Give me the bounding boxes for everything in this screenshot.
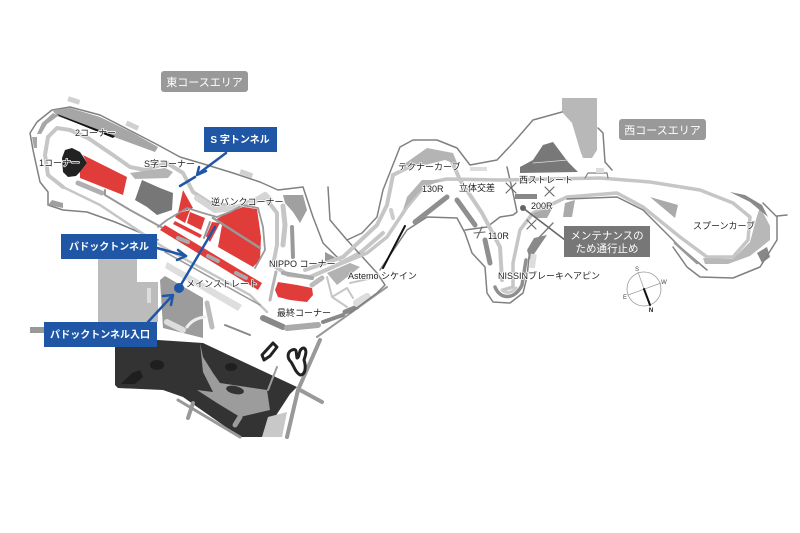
track labels: 立体交差 (459, 182, 495, 193)
label: パドックトンネル入口 (44, 322, 157, 347)
callout: maintenance closure (520, 205, 650, 257)
track labels: NISSINブレーキヘアピン (498, 270, 600, 281)
track labels: 200R (531, 201, 553, 211)
map: east course (30, 96, 387, 337)
icon: compass (623, 267, 667, 314)
track labels: 1コーナー (39, 158, 80, 168)
map: connecting section and west course (305, 112, 787, 313)
map: dark parking area (115, 303, 322, 437)
track labels: メインストレート (186, 279, 258, 289)
label: S字トンネル: S 字トンネル (210, 133, 270, 146)
icon: compass: N (649, 308, 653, 314)
map: red paddock areas (80, 155, 313, 302)
label: 西コースエリア (619, 119, 706, 140)
icon: compass: E (623, 295, 627, 301)
track labels: 逆バンクコーナー (211, 196, 283, 207)
label: 西コースエリア: 西コースエリア (624, 125, 701, 137)
label: 東コースエリア: 東コースエリア (166, 76, 243, 89)
label: 東コースエリア (161, 71, 248, 92)
track labels (39, 128, 755, 318)
track labels: Astemo シケイン (348, 271, 417, 281)
map: black infield blob (62, 148, 87, 177)
map: car park blocks (30, 98, 597, 338)
label: パドックトンネル入口: パドックトンネル入口 (50, 329, 150, 341)
track labels: 2コーナー (75, 128, 116, 138)
label: S字トンネル (204, 127, 277, 152)
map: paddock structure (158, 205, 265, 278)
callout: maintenance closure: ため通行止め (576, 242, 638, 255)
label: パドックトンネル (61, 234, 157, 259)
track labels: 西ストレート (519, 175, 573, 185)
map: grey building (135, 180, 173, 215)
blue tunnel markers (148, 153, 226, 322)
track labels: S字コーナー (144, 159, 195, 169)
track labels: 130R (422, 184, 444, 194)
icon: compass: S (635, 267, 639, 273)
track labels: 110R (488, 231, 509, 241)
track labels: 最終コーナー (277, 307, 331, 318)
track labels: スプーンカーブ (693, 220, 755, 231)
track labels: テクナーカーブ (398, 161, 460, 172)
label: パドックトンネル: パドックトンネル (69, 241, 149, 253)
callout: maintenance closure: メンテナンスの (570, 230, 644, 242)
icon: compass: W (661, 280, 667, 286)
track labels: NIPPO コーナー (269, 259, 336, 269)
map: go-kart tracks (262, 343, 306, 375)
